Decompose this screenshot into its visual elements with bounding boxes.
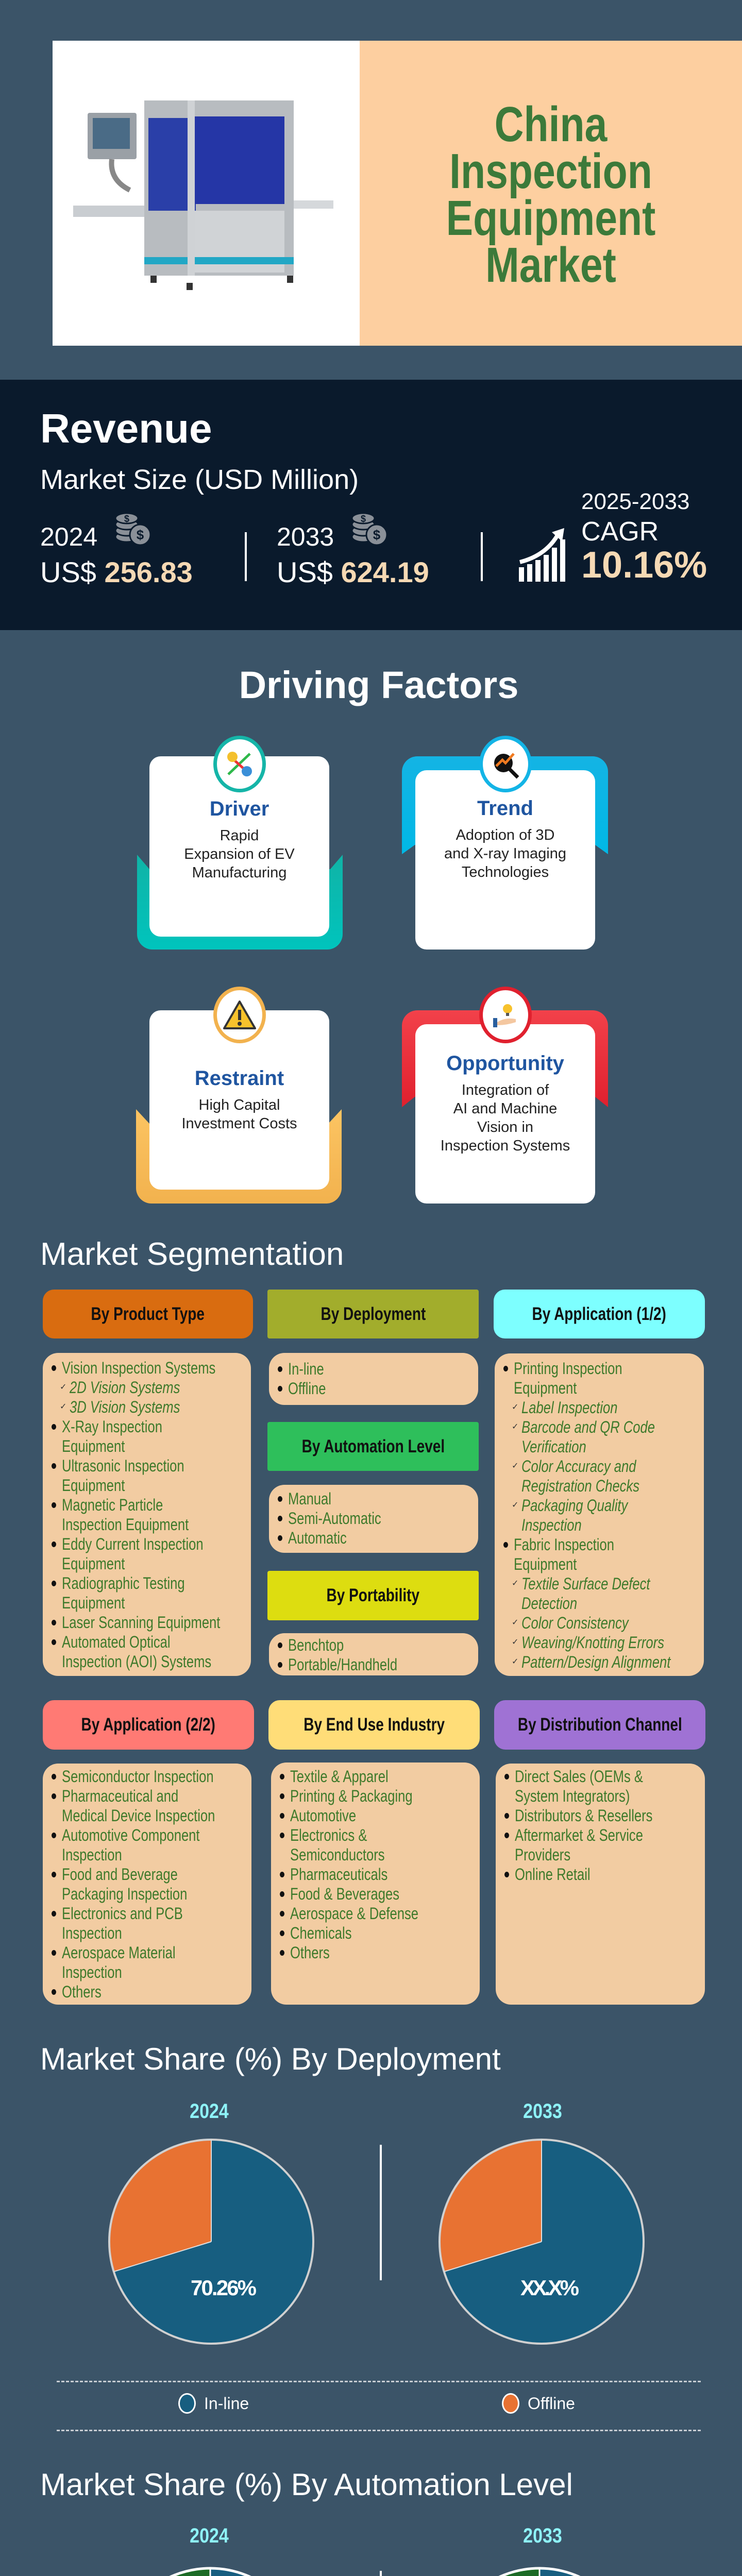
list: application 1: Color Consistency (521, 1614, 629, 1632)
list: product type: Inspection Equipment (62, 1515, 189, 1534)
header: application 2 (43, 1700, 254, 1750)
list: product type: X-Ray Inspection (62, 1417, 162, 1436)
header: by product type: By Product Type (91, 1303, 205, 1324)
list: application 2: Inspection (62, 1924, 122, 1942)
pie: automation 2033 (499, 2567, 580, 2576)
list: application 1: Equipment (514, 1555, 577, 1573)
hero: title panel: Equipment (446, 191, 655, 246)
list: end use: Electronics & (290, 1826, 367, 1844)
list: product type: Equipment (62, 1594, 125, 1612)
hero: title panel: Market (485, 238, 616, 293)
list: end use: Pharmaceuticals (290, 1865, 387, 1884)
card: restraint (136, 987, 342, 1204)
list: distribution: Distributors & Resellers (515, 1806, 652, 1825)
list: application 2: Automotive Component (62, 1826, 200, 1844)
header: by application 1: By Application (1/2) (532, 1303, 666, 1324)
list: application 2: Pharmaceutical and (62, 1787, 178, 1805)
list: distribution: System Integrators) (515, 1787, 630, 1805)
header: end use: By End Use Industry (303, 1715, 445, 1735)
list: application 2: Medical Device Inspection (62, 1806, 215, 1825)
list: application 1 (495, 1353, 704, 1676)
icon: coins (352, 514, 386, 544)
divider (380, 2571, 382, 2576)
heading: share by automation: Market Share (%) By Automation Level (40, 2467, 573, 2502)
icon: opportunity (479, 987, 532, 1043)
list: application 1: Inspection (521, 1516, 582, 1534)
list: product type: Equipment (62, 1476, 125, 1495)
card: trend: Technologies (462, 864, 549, 880)
list: application 2: Semiconductor Inspection (62, 1767, 214, 1786)
list: application 1: Detection (521, 1594, 577, 1613)
card: opportunity: Inspection Systems (441, 1138, 570, 1154)
list: application 2 (43, 1764, 251, 2005)
divider (481, 532, 483, 581)
CAGR block (581, 489, 707, 586)
card: opportunity (402, 987, 608, 1204)
header: distribution: By Distribution Channel (518, 1715, 682, 1735)
list: distribution: Providers (515, 1845, 570, 1864)
card: driver: Expansion of EV (184, 846, 295, 862)
stat 2024 (40, 514, 193, 588)
header: portability (267, 1571, 479, 1620)
hero: title panel (360, 41, 742, 346)
list: product type: Automated Optical (62, 1633, 171, 1651)
card: opportunity: Integration of (462, 1082, 549, 1098)
list: application 1: Barcode and QR Code (521, 1418, 655, 1436)
list: deployment: Offline (288, 1379, 326, 1398)
icon: driver (213, 736, 266, 792)
icon: trend (479, 736, 532, 792)
header: application 2: By Application (2/2) (81, 1715, 215, 1735)
year label 2033: 2033 (523, 2524, 562, 2547)
card: driver: Manufacturing (192, 865, 286, 881)
legend: deployment: In-line (204, 2394, 249, 2412)
list: application 1: Packaging Quality (521, 1496, 628, 1515)
list: product type: Eddy Current Inspection (62, 1535, 204, 1553)
CAGR block: 2025-2033 (581, 489, 689, 514)
header: by application 1 (494, 1290, 705, 1338)
revenue heading: Revenue (40, 405, 212, 451)
card: driver (137, 736, 343, 950)
list: application 2: Others (62, 1982, 102, 2001)
list: application 1: Textile Surface Defect (521, 1574, 650, 1593)
card: trend (402, 736, 608, 950)
list: end use: Food & Beverages (290, 1885, 399, 1903)
list: application 1: Pattern/Design Alignment (521, 1653, 670, 1671)
list: application 1: Fabric Inspection (514, 1535, 614, 1554)
hero: title panel: Inspection (449, 144, 652, 199)
list: end use: Chemicals (290, 1924, 351, 1942)
card: restraint: Investment Costs (181, 1115, 297, 1132)
list: automation: Semi-Automatic (288, 1509, 381, 1528)
list: application 2: Packaging Inspection (62, 1885, 187, 1903)
list: product type (43, 1353, 251, 1676)
list: automation: Manual (288, 1489, 331, 1508)
card: trend: Adoption of 3D (456, 827, 554, 843)
year label 2024: 2024 (190, 2524, 229, 2547)
list: application 2: Inspection (62, 1845, 122, 1864)
list: end use: Aerospace & Defense (290, 1904, 418, 1923)
list: end use: Others (290, 1943, 330, 1962)
year label 2033: 2033 (523, 2100, 562, 2123)
list: application 2: Aerospace Material (62, 1943, 176, 1962)
stat 2033 (277, 514, 429, 588)
list: product type: Vision Inspection Systems (62, 1359, 215, 1377)
header: portability: By Portability (327, 1585, 419, 1605)
card: restraint: Restraint (195, 1067, 284, 1090)
header: by deployment (267, 1290, 479, 1338)
list: application 1: Printing Inspection (514, 1359, 622, 1378)
stat 2033: 2033 (277, 522, 334, 551)
list: end use: Semiconductors (290, 1845, 385, 1864)
list: application 1: Label Inspection (521, 1398, 617, 1417)
pie: deployment 2033: XX.X% (520, 2276, 579, 2300)
list: application 1: Equipment (514, 1379, 577, 1397)
list: product type: Radiographic Testing (62, 1574, 185, 1592)
list: end use: Automotive (290, 1806, 356, 1825)
heading: market segmentation: Market Segmentation (40, 1236, 344, 1272)
list: deployment: In-line (288, 1360, 324, 1378)
revenue band (0, 380, 742, 630)
header: automation level: By Automation Level (301, 1436, 445, 1456)
list: product type: 3D Vision Systems (70, 1398, 180, 1416)
card: driver: Driver (210, 798, 269, 820)
list: distribution (496, 1764, 705, 2005)
legend: deployment (178, 2393, 575, 2414)
card: restraint: High Capital (199, 1097, 280, 1113)
icon: growth chart (519, 528, 565, 582)
list: deployment (269, 1353, 478, 1405)
list: product type: 2D Vision Systems (70, 1378, 180, 1397)
pie: automation 2024 (169, 2567, 251, 2576)
list: end use: Textile & Apparel (290, 1767, 389, 1786)
stat 2033: US$ 624.19 (277, 556, 429, 588)
heading: share by deployment: Market Share (%) By Deployment (40, 2042, 501, 2076)
list: application 1: Verification (521, 1437, 586, 1456)
icon: coins: $ (124, 514, 129, 524)
icon: coins: $ (361, 514, 366, 524)
pie: deployment 2024: 70.26% (191, 2276, 257, 2300)
list: product type: Equipment (62, 1554, 125, 1573)
heading: driving factors: Driving Factors (239, 664, 518, 706)
header: automation level (267, 1422, 479, 1471)
list: product type: Inspection (AOI) Systems (62, 1652, 211, 1671)
icon: coins: $ (373, 527, 381, 543)
header: distribution (494, 1700, 705, 1750)
pie: deployment 2033 (439, 2139, 645, 2345)
stat 2024: 2024 (40, 522, 97, 551)
pie: deployment 2024 (108, 2139, 314, 2345)
icon: coins: $ (137, 527, 144, 543)
card: opportunity: Opportunity (446, 1052, 564, 1075)
stat 2024: US$ 256.83 (40, 556, 193, 588)
divider (380, 2145, 382, 2280)
list: end use (271, 1762, 480, 2005)
list: distribution: Online Retail (515, 1865, 591, 1884)
hero: title panel: China (495, 97, 607, 152)
header: end use (268, 1700, 480, 1750)
list: distribution: Direct Sales (OEMs & (515, 1767, 643, 1786)
list: distribution: Aftermarket & Service (515, 1826, 643, 1844)
card: opportunity: AI and Machine (453, 1100, 557, 1117)
list: application 1: Color Accuracy and (521, 1457, 636, 1476)
list: application 1: Weaving/Knotting Errors (521, 1633, 664, 1652)
list: application 2: Electronics and PCB (62, 1904, 183, 1923)
list: product type: Magnetic Particle (62, 1496, 163, 1514)
list: product type: Equipment (62, 1437, 125, 1455)
list: application 1: Registration Checks (521, 1477, 639, 1495)
year label 2024: 2024 (190, 2100, 229, 2123)
card: trend: and X-ray Imaging (444, 845, 566, 862)
list: application 2: Food and Beverage (62, 1865, 178, 1884)
icon: warning (213, 987, 266, 1043)
icon: coins (116, 514, 149, 544)
CAGR block: 10.16% (581, 545, 707, 586)
list: product type: Ultrasonic Inspection (62, 1456, 184, 1475)
hero: product image panel (53, 41, 360, 346)
header: by product type (43, 1290, 253, 1338)
market size subheading: Market Size (USD Million) (40, 464, 359, 495)
header: by deployment: By Deployment (321, 1303, 426, 1324)
list: automation: Automatic (288, 1529, 347, 1547)
list: application 2: Inspection (62, 1963, 122, 1981)
list: portability (269, 1633, 478, 1675)
list: product type: Laser Scanning Equipment (62, 1613, 220, 1632)
card: driver: Rapid (220, 827, 259, 844)
card: trend: Trend (477, 797, 533, 820)
list: portability: Benchtop (288, 1636, 344, 1654)
legend: deployment: Offline (528, 2394, 575, 2412)
list: portability: Portable/Handheld (288, 1655, 397, 1674)
card: opportunity: Vision in (477, 1119, 533, 1136)
CAGR block: CAGR (581, 517, 659, 547)
list: automation (269, 1485, 478, 1553)
divider (245, 532, 247, 581)
list: end use: Printing & Packaging (290, 1787, 413, 1805)
